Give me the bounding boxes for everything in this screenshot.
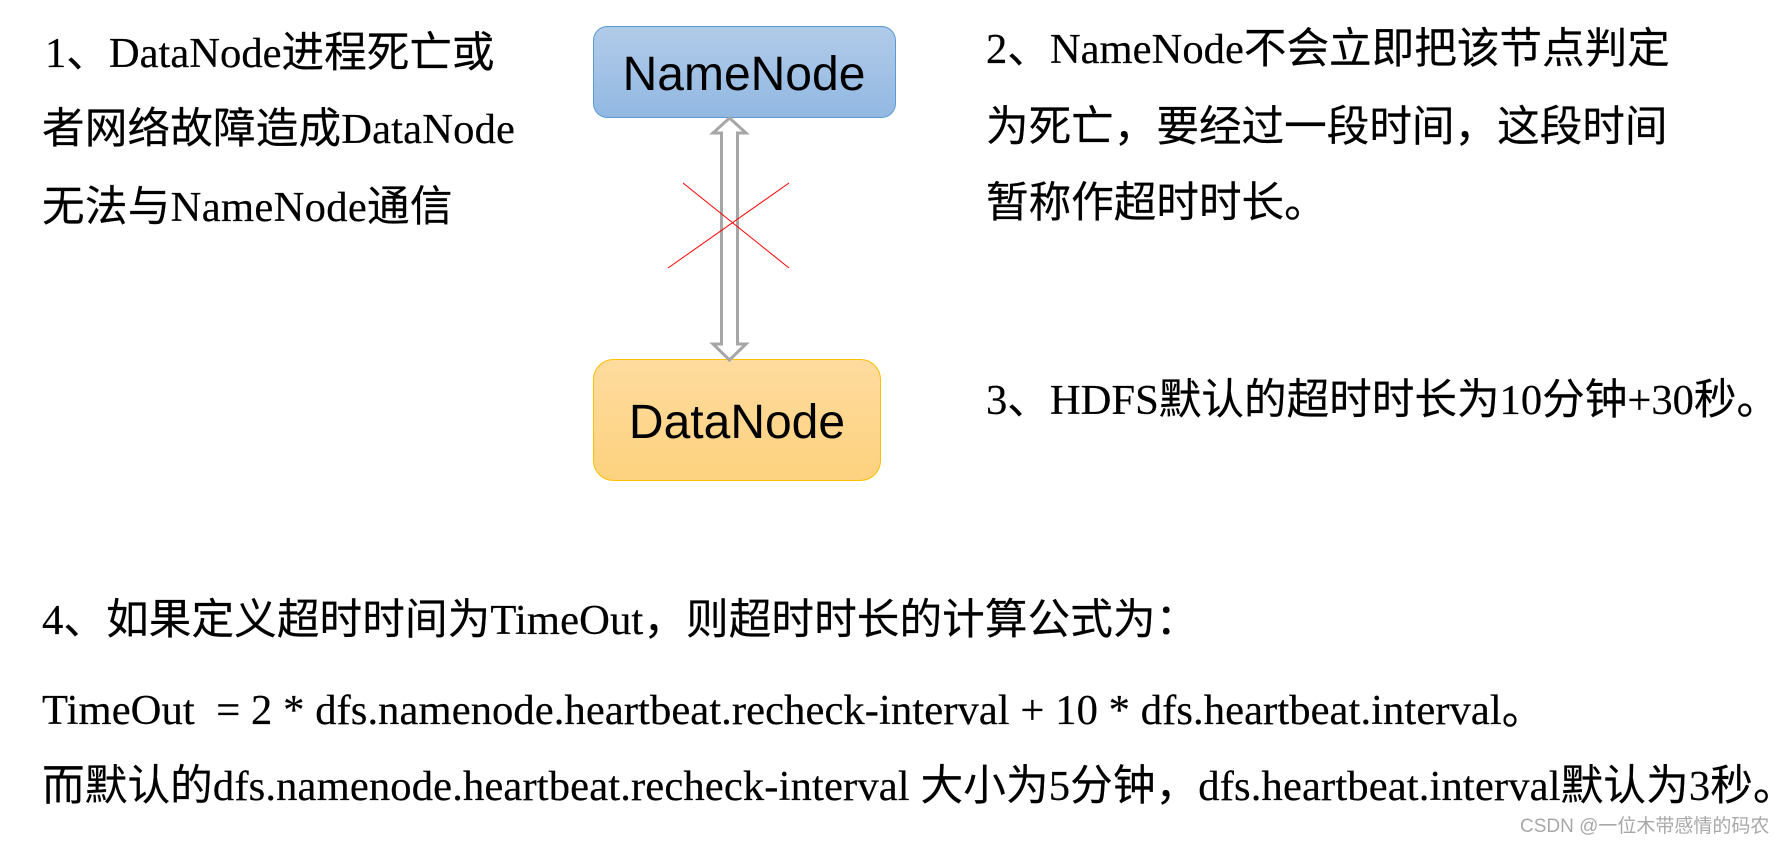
text block: step 4 heading: 4、如果定义超时时间为TimeOut，则超时时长的计算公式为： <box>42 597 1198 644</box>
text block: step 3: 3、HDFS默认的超时时长为10分钟+30秒。 <box>986 377 1779 424</box>
text block: step 2: 暂称作超时时长。 <box>986 180 1327 227</box>
DataNode box <box>594 360 880 480</box>
text block: step 2: 2、NameNode不会立即把该节点判定 <box>986 26 1670 73</box>
text block: step 1: 无法与NameNode通信 <box>42 184 453 231</box>
NameNode box <box>594 26 896 118</box>
double arrow between nodes <box>713 118 746 360</box>
red cross: connection broken <box>668 183 789 268</box>
text block: step 2 <box>986 26 1670 227</box>
text block: step 2: 为死亡，要经过一段时间，这段时间 <box>986 104 1668 151</box>
text block: step 1: 1、DataNode进程死亡或 <box>45 30 495 77</box>
text block: step 1: 者网络故障造成DataNode <box>42 106 515 153</box>
NameNode box: NameNode <box>623 48 865 101</box>
formula: TimeOut = 2 * dfs.namenode.heartbeat.recheck-interval + 10 * dfs.heartbeat.interval。 <box>42 687 1544 734</box>
text block: step 1 <box>42 30 515 231</box>
DataNode box: DataNode <box>629 396 845 449</box>
defaults note: 而默认的dfs.namenode.heartbeat.recheck-interval 大小为5分钟，dfs.heartbeat.interval默认为3秒。 <box>42 763 1787 810</box>
watermark: CSDN @一位木带感情的码农 <box>1520 815 1769 837</box>
